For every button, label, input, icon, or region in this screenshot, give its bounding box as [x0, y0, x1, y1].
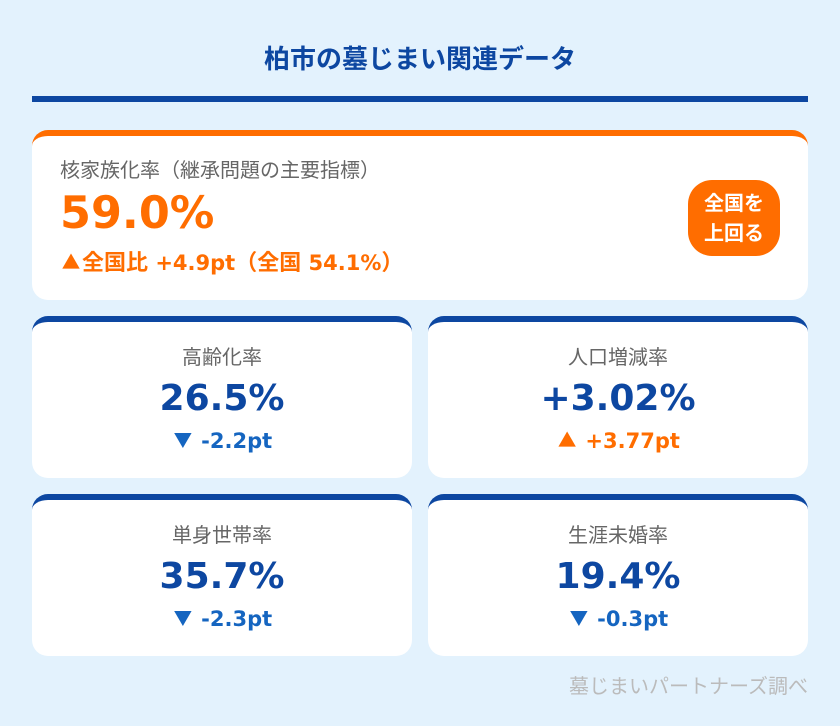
- panel: aging rate: [32, 316, 412, 478]
- delta: +3.77pt: [585, 429, 680, 453]
- title: 柏市の墓じまい関連データ: [264, 45, 576, 75]
- delta: ▲: [558, 427, 576, 453]
- badge: above national: 上回る: [704, 221, 764, 245]
- delta: ▼: [174, 427, 192, 453]
- delta: ▼: [570, 605, 588, 631]
- value: 26.5%: [160, 378, 284, 419]
- panel: never married: [428, 494, 808, 656]
- delta: [570, 605, 668, 631]
- title underline: [32, 96, 808, 102]
- panel: core family rate: [32, 130, 808, 300]
- badge: above national: 全国を: [704, 191, 764, 215]
- panel: single households: [32, 494, 412, 656]
- comparison to national: ▲: [62, 249, 80, 275]
- delta: ▼: [174, 605, 192, 631]
- value: core family rate: 59.0%: [60, 188, 214, 239]
- value: 19.4%: [556, 556, 680, 597]
- label: 高齢化率: [182, 345, 262, 369]
- delta: -0.3pt: [597, 607, 668, 631]
- label: 人口増減率: [568, 345, 668, 369]
- delta: -2.2pt: [201, 429, 272, 453]
- delta: -2.3pt: [201, 607, 272, 631]
- value: 35.7%: [160, 556, 284, 597]
- comparison to national: 全国比 +4.9pt（全国 54.1%）: [82, 245, 403, 277]
- label: 生涯未婚率: [568, 523, 668, 547]
- value: +3.02%: [540, 378, 696, 419]
- panel: population change: [428, 316, 808, 478]
- delta: [174, 605, 272, 631]
- label: core family rate: 核家族化率（継承問題の主要指標）: [60, 158, 380, 182]
- source note: 墓じまいパートナーズ調べ: [569, 674, 808, 698]
- delta: [174, 427, 272, 453]
- badge: above national: [688, 180, 780, 256]
- label: 単身世帯率: [172, 523, 272, 547]
